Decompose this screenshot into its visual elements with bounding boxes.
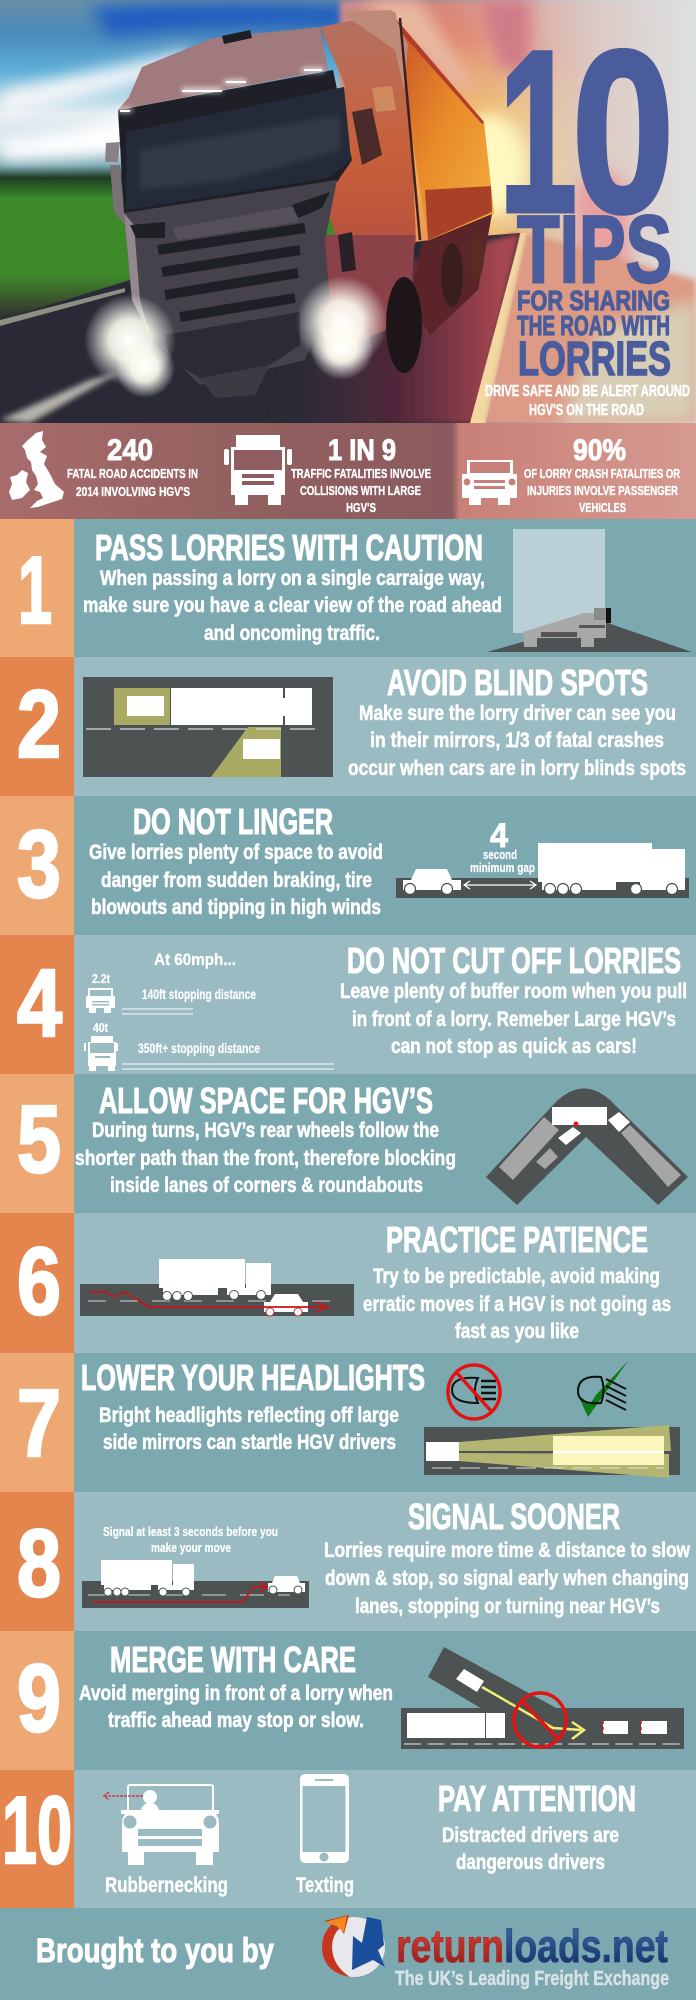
body text — [340, 980, 687, 1058]
chart: stopping distances: 140ft stopping distance — [142, 986, 256, 1002]
stat: fatal accidents: 2014 INVOLVING HGV'S — [76, 484, 190, 499]
heading: DO NOT LINGER — [133, 801, 333, 842]
body text: Give lorries plenty of space to avoid — [89, 841, 383, 864]
label: rubbernecking: Rubbernecking — [105, 1874, 228, 1897]
chart: stopping distances: At 60mph... — [154, 950, 236, 969]
illustration: signal before moving: Signal at least 3 seconds before you — [103, 1524, 278, 1539]
body text: dangerous drivers — [456, 1851, 605, 1874]
stat: fatal accidents: FATAL ROAD ACCIDENTS IN — [67, 466, 198, 481]
body text: Distracted drivers are — [442, 1824, 619, 1847]
body text: and oncoming traffic. — [204, 622, 380, 645]
panel: footer — [0, 1908, 696, 2000]
label: texting: Texting — [296, 1874, 354, 1897]
panel: tip 1 pass with caution — [0, 519, 696, 657]
body text — [75, 1119, 456, 1197]
body text: blowouts and tipping in high winds — [91, 896, 381, 919]
body text — [348, 702, 686, 780]
logo icon — [322, 1915, 385, 1977]
panel: tip 5 allow space — [0, 1074, 696, 1213]
body text: traffic ahead may stop or slow. — [108, 1709, 364, 1732]
panel: tip 3 do not linger — [0, 796, 696, 935]
body text: fast as you like — [455, 1320, 579, 1343]
stat: fatal accidents — [67, 434, 198, 499]
number 2: 2 — [17, 671, 61, 778]
panel: tip 2 blind spots — [0, 657, 696, 796]
body text: shorter path than the front, therefore blocking — [75, 1147, 456, 1170]
body text — [83, 567, 502, 645]
body text: inside lanes of corners & roundabouts — [110, 1174, 423, 1197]
body text — [324, 1539, 691, 1618]
trailer — [390, 12, 494, 242]
icon: lorry front — [224, 435, 292, 505]
body text — [363, 1265, 671, 1343]
subtitle — [485, 383, 690, 419]
chart: stopping distances — [84, 950, 334, 1071]
body text: During turns, HGV’s rear wheels follow the — [92, 1119, 439, 1142]
roof lights — [118, 68, 324, 112]
stat: traffic fatalities: 1 IN 9 — [328, 434, 396, 467]
illustration: four second gap: minimum gap — [470, 860, 535, 875]
illustration: lorry blind spot diagram — [83, 677, 333, 777]
heading: ALLOW SPACE FOR HGV’S — [99, 1080, 433, 1121]
icon: dipped beam with tick — [578, 1361, 628, 1417]
heading: PASS LORRIES WITH CAUTION — [95, 527, 483, 568]
title — [499, 3, 674, 386]
stat: traffic fatalities — [291, 434, 431, 515]
body text: can not stop as quick as cars! — [391, 1035, 637, 1058]
body text: danger from sudden braking, tire — [101, 869, 372, 892]
body text: side mirrors can startle HGV drivers — [103, 1431, 396, 1454]
chart: stopping distances: 350ft+ stopping distance — [138, 1040, 260, 1056]
body text: make sure you have a clear view of the road ahead — [83, 594, 502, 617]
illustration: four second gap: second — [483, 847, 517, 862]
panel: tip 10 pay attention — [0, 1770, 696, 1908]
front body and grille — [124, 180, 337, 385]
icon: small lorry — [84, 1036, 118, 1071]
windscreen — [126, 87, 351, 210]
body text — [99, 1404, 399, 1454]
heading: LOWER YOUR HEADLIGHTS — [81, 1357, 425, 1398]
panel: tip 4 do not cut off — [0, 935, 696, 1074]
illustration: erratic car path — [80, 1259, 354, 1316]
stat: traffic fatalities: TRAFFIC FATALITIES INVOLVE — [291, 466, 431, 481]
stat: passenger vehicles — [524, 434, 680, 515]
number 3: 3 — [17, 811, 61, 918]
heading: MERGE WITH CARE — [110, 1639, 356, 1680]
stat: traffic fatalities: COLLISIONS WITH LARGE — [300, 483, 421, 498]
stat: traffic fatalities: HGV'S — [346, 500, 376, 515]
number 7: 7 — [17, 1370, 61, 1477]
credit text: Brought to you by — [36, 1932, 274, 1970]
icon: rubbernecking car — [104, 1785, 219, 1865]
body text — [442, 1824, 619, 1874]
body text: Avoid merging in front of a lorry when — [79, 1682, 393, 1705]
roof and visor — [118, 27, 328, 110]
illustration: signal before moving: make your move — [151, 1540, 231, 1555]
number 1: 1 — [18, 537, 52, 644]
hero photo: lorry at speed — [0, 0, 696, 423]
panel: tip 7 lower headlights — [0, 1353, 696, 1492]
body text: When passing a lorry on a single carraige way, — [100, 567, 485, 590]
number 10: 10 — [2, 1777, 72, 1884]
illustration: four second gap — [396, 817, 689, 898]
stat: passenger vehicles: VEHICLES — [579, 500, 626, 515]
illustration: signal before moving — [82, 1524, 309, 1608]
number 9: 9 — [17, 1645, 61, 1752]
headlights — [84, 294, 176, 386]
cab side — [320, 12, 416, 247]
panel: tip 6 practice patience — [0, 1213, 696, 1353]
illustration: car overtaking behind lorry — [487, 529, 692, 652]
illustration: four second gap: 4 — [490, 817, 508, 855]
icon: small van — [86, 988, 115, 1013]
wheels — [386, 277, 422, 373]
icon: no full beam — [448, 1365, 500, 1419]
body text — [79, 1682, 393, 1732]
body text: Bright headlights reflecting off large — [99, 1404, 399, 1427]
panel: tip 9 merge with care — [0, 1631, 696, 1770]
icon: UK map — [9, 431, 64, 508]
stat: passenger vehicles: 90% — [573, 434, 626, 467]
icon: van front — [462, 460, 517, 505]
subtitle: HGV'S ON THE ROAD — [529, 402, 644, 419]
number 6: 6 — [17, 1228, 61, 1335]
illustration: lorry turning a corner — [486, 1088, 688, 1205]
illustration: merging diagram — [401, 1647, 684, 1749]
icon: smartphone — [300, 1774, 349, 1863]
panel: statistics band — [0, 423, 696, 519]
chart: stopping distances: 2.2t — [92, 971, 111, 986]
title: 1 — [499, 3, 577, 260]
number 5: 5 — [17, 1086, 61, 1193]
illustration: headlight beams — [424, 1425, 680, 1478]
number 4: 4 — [17, 950, 62, 1057]
chart: stopping distances: 40t — [93, 1020, 109, 1035]
number 8: 8 — [17, 1510, 61, 1617]
road surface — [0, 233, 520, 423]
body text — [89, 841, 383, 919]
stat: fatal accidents: 240 — [107, 434, 153, 467]
panel: tip 8 signal sooner — [0, 1492, 696, 1631]
mirrors — [105, 142, 120, 162]
